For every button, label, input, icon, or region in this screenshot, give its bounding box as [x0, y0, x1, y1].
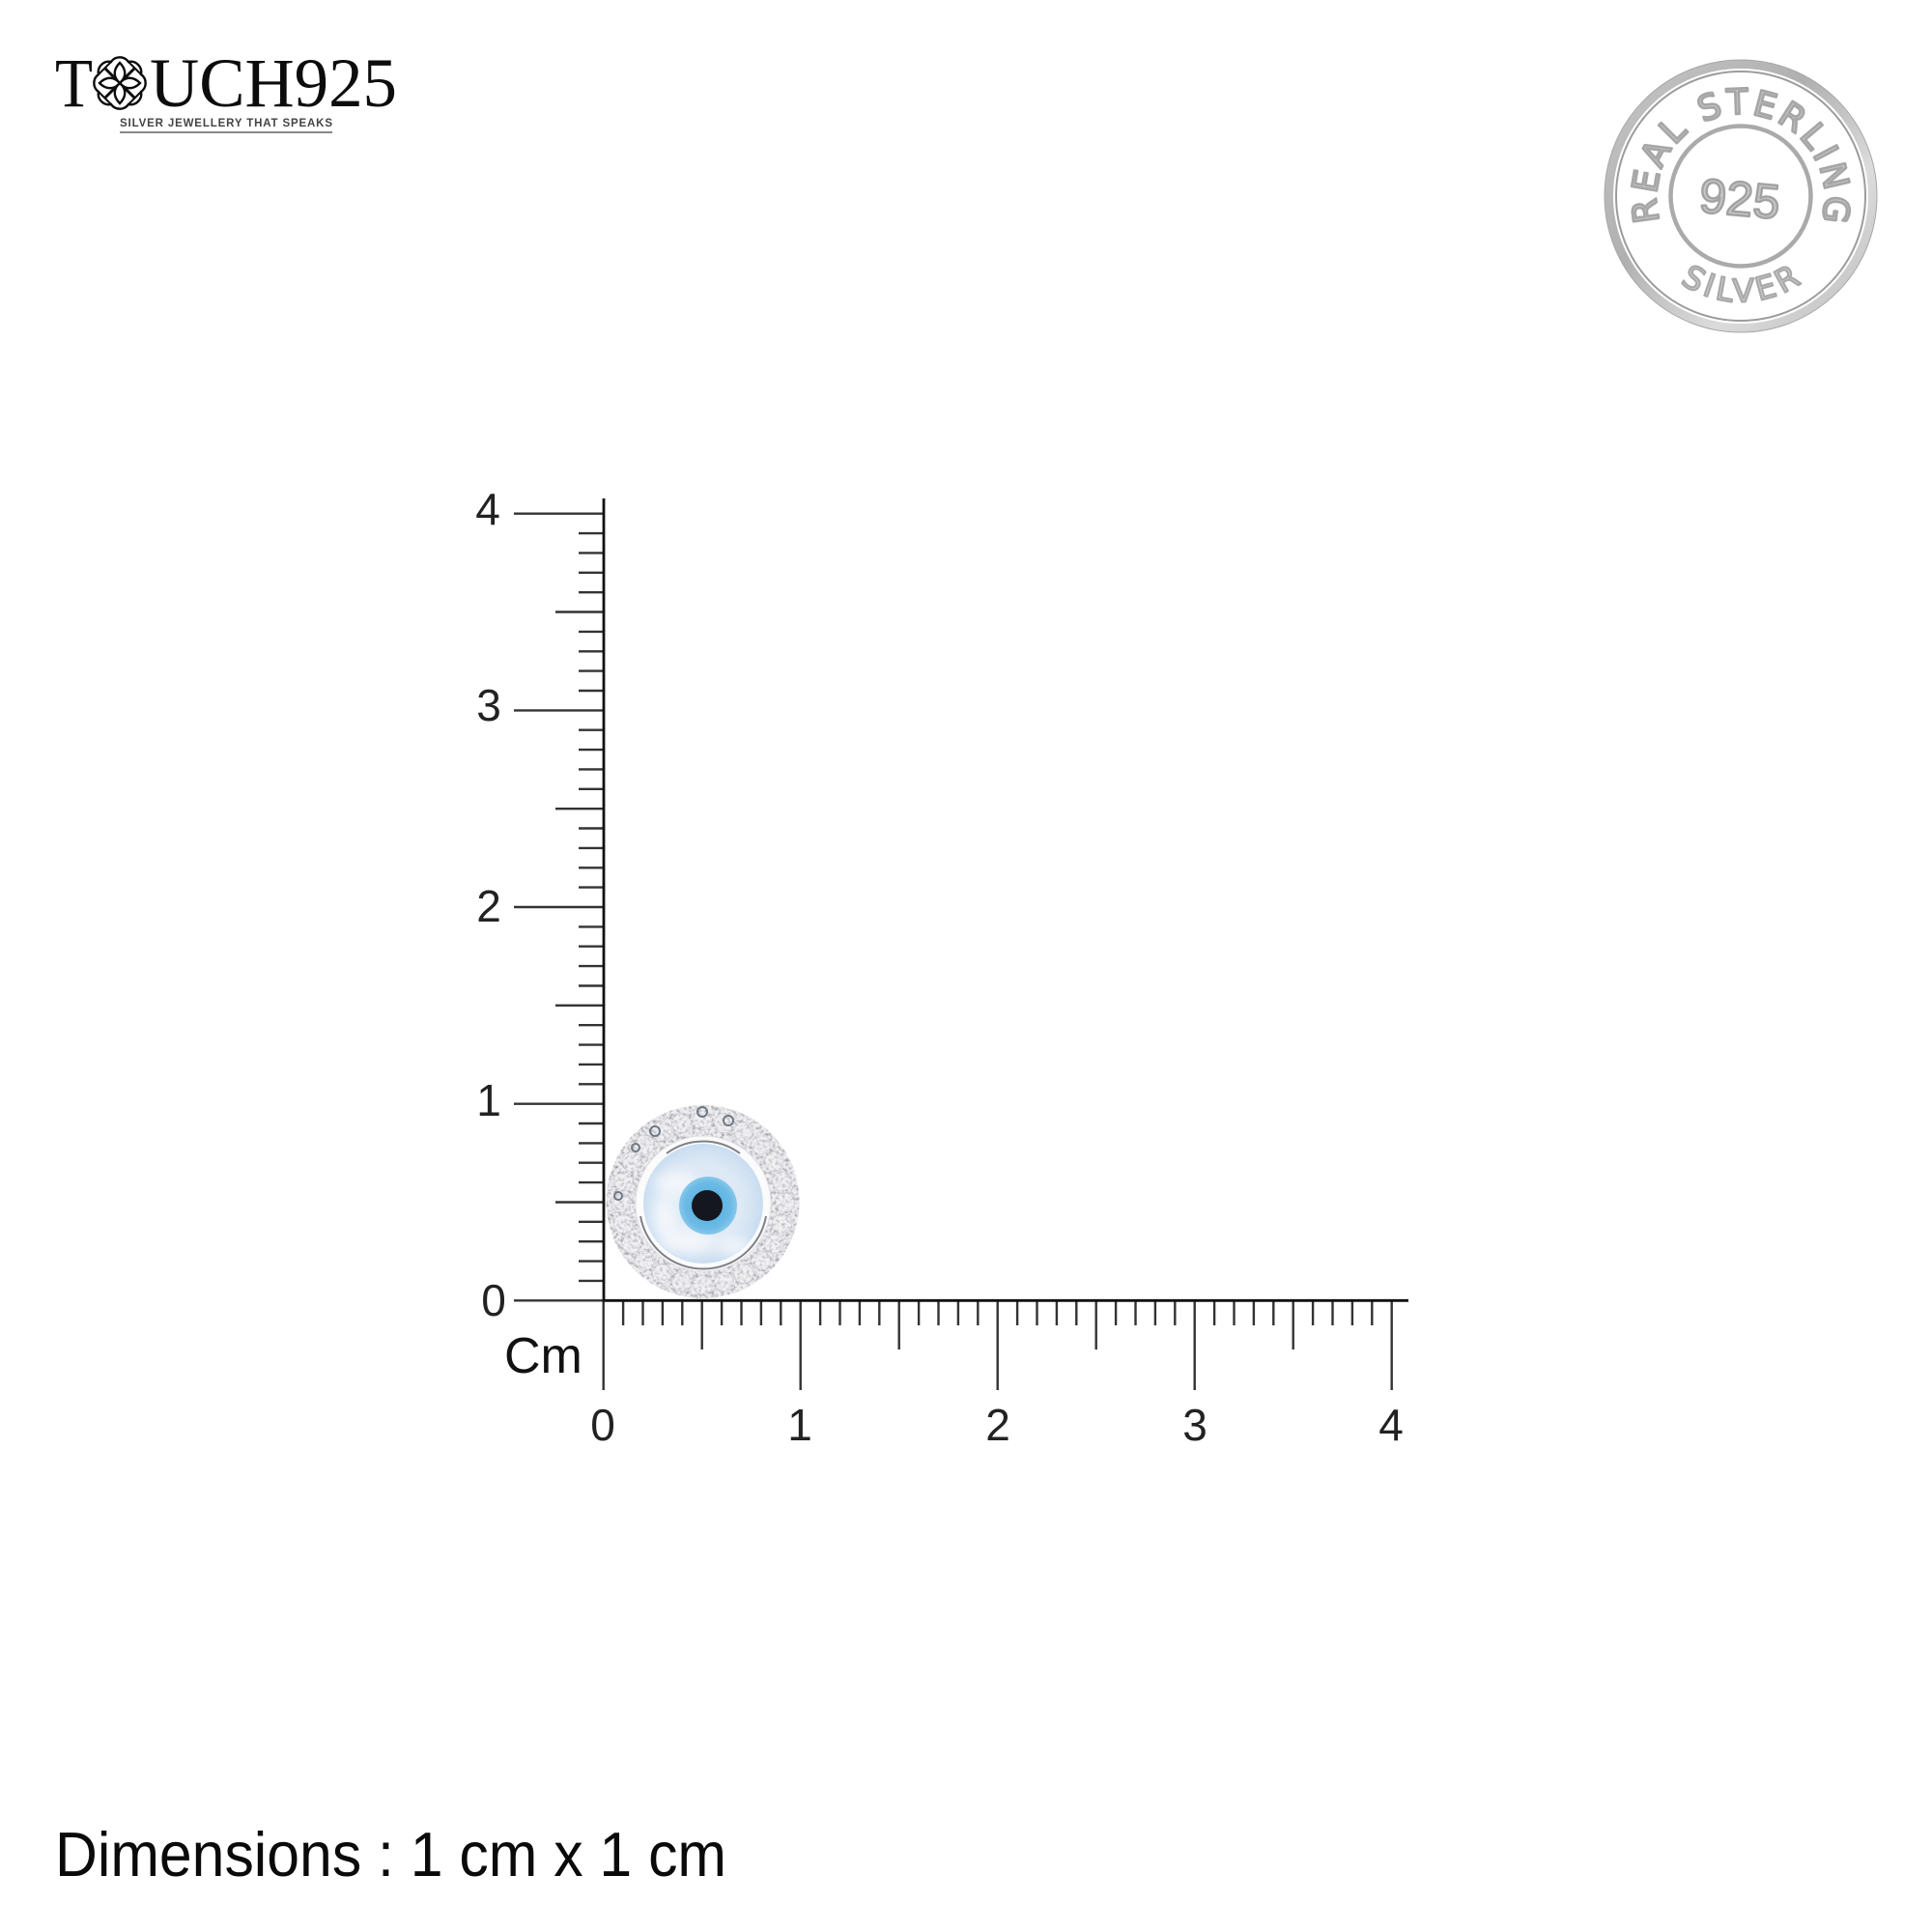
vertical scale labels: 2 — [476, 881, 501, 931]
horizontal scale labels: 2 — [985, 1400, 1010, 1450]
pave crystal halo — [607, 1105, 800, 1298]
vertical scale labels: 1 — [476, 1075, 501, 1125]
blue iris — [679, 1177, 737, 1235]
vertical scale labels: 4 — [475, 484, 500, 534]
seal inner ring — [1671, 126, 1810, 267]
darker accent crystals — [614, 1107, 733, 1200]
horizontal scale labels: 0 — [590, 1400, 615, 1450]
seal outer rings — [1605, 60, 1877, 332]
evil eye stud product photo — [607, 1105, 800, 1298]
black pupil — [692, 1190, 723, 1221]
unit label: Cm — [504, 1328, 582, 1384]
mother of pearl stone — [643, 1144, 763, 1264]
vertical scale ticks — [514, 514, 604, 1300]
ruler axes — [604, 498, 1408, 1300]
centimetre ruler — [475, 484, 1408, 1450]
vertical scale labels: 3 — [476, 680, 501, 730]
seal centre value: 925 — [1697, 168, 1782, 230]
silver bezel — [636, 1136, 771, 1271]
vertical scale labels — [475, 484, 506, 1325]
logo tagline: SILVER JEWELLERY THAT SPEAKS — [120, 118, 332, 129]
crystal stones — [611, 1111, 794, 1294]
logo wordmark: T — [55, 44, 93, 122]
horizontal scale ticks — [604, 1300, 1392, 1390]
seal curved text: silver: SILVER — [1681, 265, 1803, 303]
seal curved text: real sterling: REAL STERLING — [1631, 87, 1851, 223]
horizontal scale labels — [590, 1400, 1404, 1450]
bezel shadow arcs — [640, 1141, 766, 1269]
horizontal scale labels: 4 — [1378, 1400, 1404, 1450]
horizontal scale labels: 3 — [1182, 1400, 1208, 1450]
logo wordmark: UCH925 — [150, 44, 397, 122]
icon: logo quatrefoil emblem — [94, 57, 146, 109]
tagline underline — [120, 131, 332, 133]
brand logo — [55, 44, 397, 133]
925 sterling silver seal — [1604, 60, 1878, 332]
vertical scale labels: 0 — [481, 1275, 506, 1325]
dimensions caption: Dimensions : 1 cm x 1 cm — [55, 1819, 726, 1889]
horizontal scale labels: 1 — [787, 1400, 812, 1450]
